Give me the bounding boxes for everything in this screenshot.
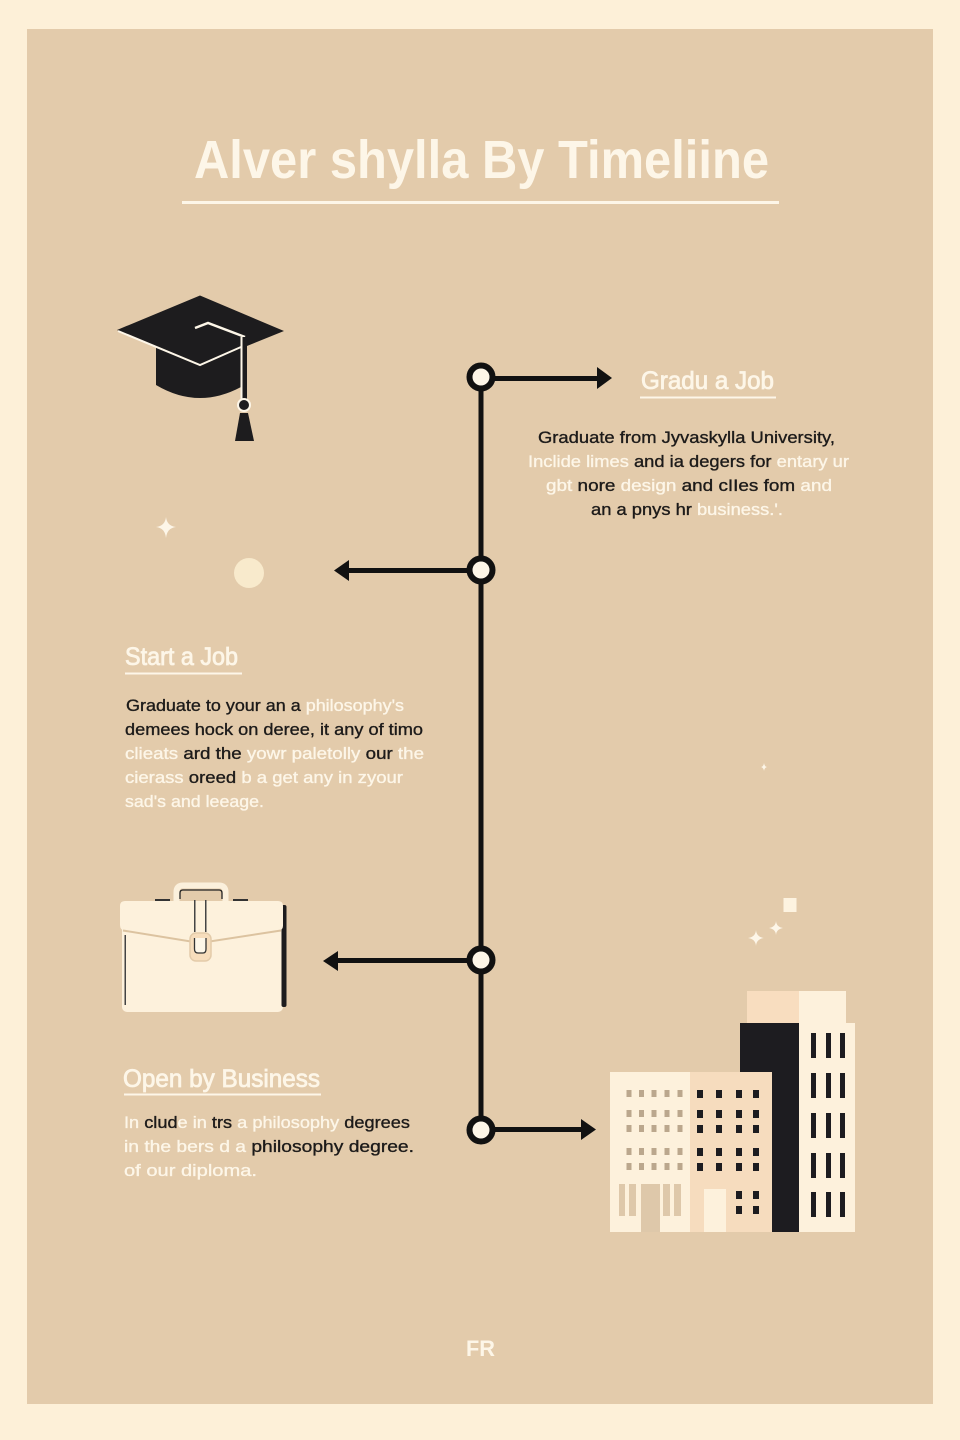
body text: Graduate to your an a philosophy's (126, 696, 404, 715)
icon: briefcase (120, 886, 286, 1012)
body text (528, 428, 849, 519)
node 1 (470, 366, 492, 388)
body text: an a pnys hr business.'. (591, 500, 783, 519)
body text: Graduate from Jyvaskylla University, (538, 428, 835, 447)
title: Alver shylla By Timeliine (194, 130, 769, 190)
icon: sparkles and square (748, 898, 796, 946)
body text: in the bers d a philosophy degree. (124, 1137, 414, 1156)
middle building windows (697, 1090, 759, 1214)
tower windows (811, 1033, 845, 1217)
heading: Start a Job: Start a Job (125, 643, 238, 671)
icon: office buildings (610, 991, 855, 1232)
arrow: to start a job (334, 560, 476, 581)
heading: Open by Business: Open by Business (123, 1065, 320, 1093)
icon: graduation cap (117, 296, 284, 441)
body text: clieats ard the yowr paletolly our the (125, 744, 424, 763)
body text: In clude in trs a philosophy degrees (124, 1113, 410, 1132)
body text: cierass oreed b a get any in zyour (125, 768, 403, 787)
text block: Start a Job (125, 643, 424, 811)
icon: left sparkle (156, 517, 176, 538)
heading: Gradu a Job: Gradu a Job (641, 367, 774, 395)
body text: sad's and leeage. (125, 792, 264, 811)
left building windows (626, 1090, 682, 1170)
arrow: to Gradu a Job (490, 367, 612, 389)
body text (124, 1113, 414, 1180)
node 4 (470, 1118, 492, 1142)
text block: Open by Business (123, 1065, 414, 1180)
body text: of our diploma. (124, 1161, 257, 1180)
text block: Gradu a Job (528, 367, 849, 519)
footer mark: FR (466, 1336, 495, 1361)
node 2 (470, 558, 492, 582)
body text (125, 696, 424, 811)
arrow: to buildings (490, 1119, 596, 1140)
icon: small centre sparkle (761, 763, 767, 771)
timeline (323, 366, 612, 1142)
icon: pale dot (234, 558, 264, 588)
body text: Inclide limes and ia degers for entary ur (528, 452, 849, 471)
body text: demees hock on deree, it any of timo (125, 720, 423, 739)
arrow: to briefcase (323, 951, 475, 971)
body text: gbt nore design and cIIes fom and (546, 476, 832, 495)
node 3 (470, 948, 492, 972)
left building entrance (619, 1184, 681, 1232)
